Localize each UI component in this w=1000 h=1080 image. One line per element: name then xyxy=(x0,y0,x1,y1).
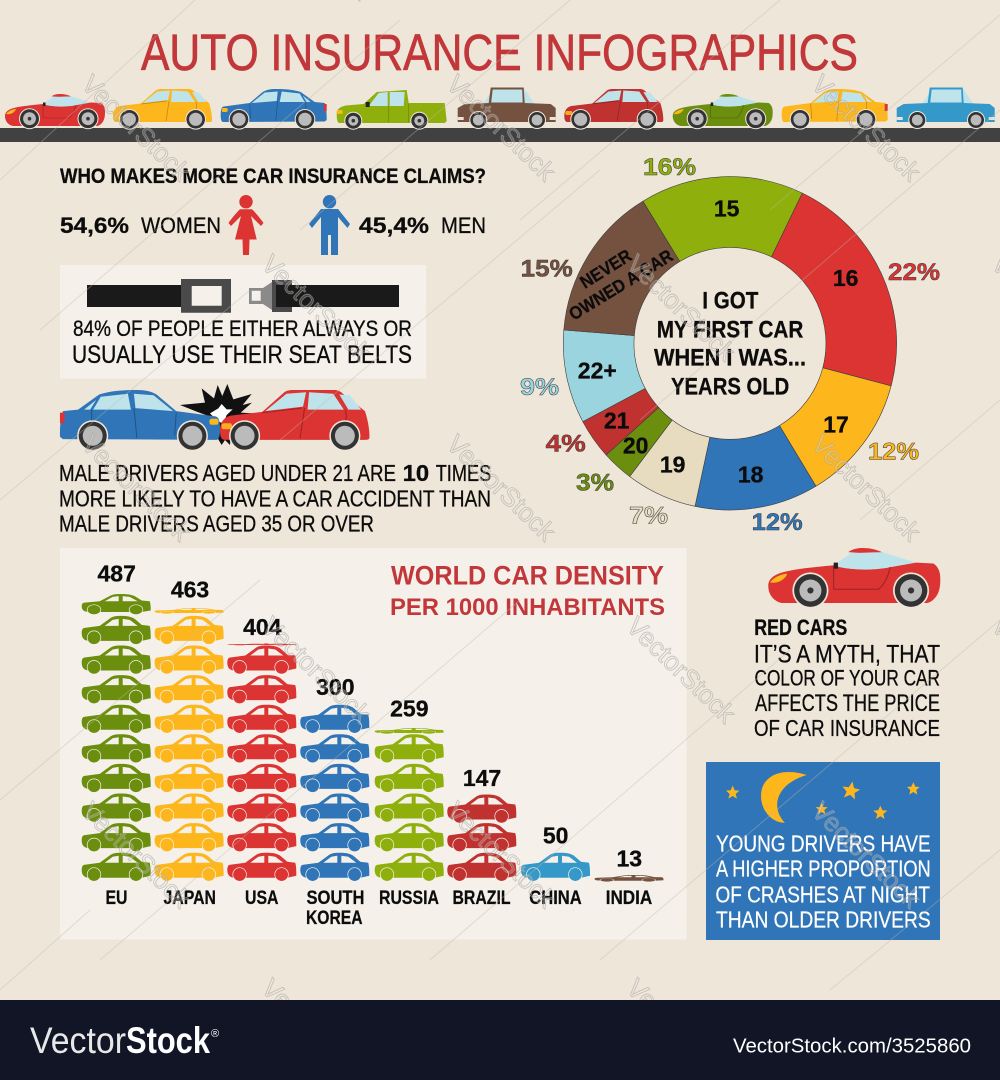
bar: South Korea 300 xyxy=(300,674,369,929)
crash text: 10 xyxy=(403,460,429,486)
bar: China 50: CHINA xyxy=(529,888,582,909)
bar: Japan 463: JAPAN xyxy=(164,888,216,909)
watermark overlay: VectorStock xyxy=(621,611,742,729)
footer logo xyxy=(30,1020,219,1061)
car: red wagon in crash xyxy=(220,390,369,451)
chart heading: WORLD CAR DENSITY xyxy=(391,560,664,590)
car: blue sedan xyxy=(221,89,327,130)
crash text: TIMES xyxy=(436,460,491,486)
car: brown old car xyxy=(458,88,556,129)
car: olive sports xyxy=(673,94,773,129)
chart heading: PER 1000 INHABITANTS xyxy=(390,594,665,621)
donut centre text: I GOT xyxy=(702,287,759,314)
icon: seat belt xyxy=(87,279,399,313)
bar: Japan 463: 463 xyxy=(171,576,209,602)
donut centre text xyxy=(654,287,806,400)
car: blue sedan in crash xyxy=(60,390,220,451)
car: light blue old car xyxy=(897,88,995,129)
bar: Brazil 147 xyxy=(447,765,516,909)
bar: Brazil 147: BRAZIL xyxy=(452,888,511,909)
donut slice labels: OWNED A CAR xyxy=(565,246,676,324)
crash text: MORE LIKELY TO HAVE A CAR ACCIDENT THAN xyxy=(59,486,491,512)
crash text xyxy=(59,460,491,537)
slice never owned xyxy=(564,201,680,336)
slice 17 xyxy=(780,368,891,486)
donut centre text: WHEN I WAS... xyxy=(654,345,806,372)
donut percent labels: 7% xyxy=(629,502,668,529)
bar: China 50: 50 xyxy=(543,822,568,848)
title: AUTO INSURANCE INFOGRAPHICS xyxy=(141,24,858,81)
illustration: car crash xyxy=(60,384,369,451)
watermark overlay: VectorStock xyxy=(256,249,377,367)
donut slice labels: 22+ xyxy=(578,357,617,383)
bar: China 50 xyxy=(521,822,590,909)
watermark overlay: VectorStock xyxy=(806,796,927,914)
slice 19 xyxy=(630,420,710,506)
footer url: VectorStock.com/3525860 xyxy=(733,1036,971,1058)
watermark overlay: VectorStock xyxy=(806,429,927,547)
bar: India 13 xyxy=(594,846,664,909)
icon: moon and stars xyxy=(726,772,920,823)
bar: USA 404: USA xyxy=(245,888,279,909)
icon: woman xyxy=(228,195,264,255)
bar: Brazil 147: 147 xyxy=(463,765,501,791)
donut centre text: MY FIRST CAR xyxy=(657,316,803,343)
car: red sports xyxy=(5,94,105,129)
footer logo: ® xyxy=(211,1028,219,1040)
panel: night crashes xyxy=(706,762,940,940)
panel: seat belts xyxy=(60,265,426,378)
seat belt text: USUALLY USE THEIR SEAT BELTS xyxy=(72,341,412,369)
donut slice labels xyxy=(565,196,858,488)
bar: EU 487 xyxy=(82,561,151,909)
chart heading xyxy=(390,560,665,621)
bar: Russia 259 xyxy=(375,696,444,909)
women statistic: WOMEN xyxy=(141,213,221,238)
watermark overlay: VectorStock xyxy=(441,429,562,547)
slice 15 xyxy=(643,177,802,262)
slice 22+ xyxy=(563,330,645,422)
bar: Russia 259: 259 xyxy=(390,696,428,722)
night crashes text: OF CRASHES AT NIGHT xyxy=(716,881,930,907)
road with row of cars xyxy=(0,88,1000,142)
bar: Japan 463 xyxy=(155,576,224,909)
red cars text: IT’S A MYTH, THAT xyxy=(754,641,940,669)
bar: USA 404: 404 xyxy=(243,614,282,640)
watermark overlay: VectorStock xyxy=(76,796,197,914)
car: large red sports car xyxy=(768,548,940,609)
men statistic: MEN xyxy=(441,213,486,238)
donut slice labels: 20 xyxy=(623,432,648,458)
seat belt text xyxy=(72,316,412,369)
donut centre text: YEARS OLD xyxy=(671,373,789,400)
bar: South Korea 300: 300 xyxy=(316,674,354,700)
donut slice labels: 18 xyxy=(738,462,764,488)
slice 21 xyxy=(583,388,659,455)
seat belt text: 84% OF PEOPLE EITHER ALWAYS OR xyxy=(73,316,412,341)
red cars text: RED CARS xyxy=(754,615,847,640)
car: red wagon xyxy=(564,89,663,130)
women statistic xyxy=(60,213,221,238)
donut slice labels: 15 xyxy=(714,196,740,222)
bar: USA 404 xyxy=(227,614,296,909)
bar: EU 487: 487 xyxy=(98,561,136,587)
donut chart: first car age xyxy=(563,177,897,510)
slice 20 xyxy=(606,408,672,476)
donut percent labels: 15% xyxy=(521,256,573,283)
men statistic xyxy=(359,213,486,238)
donut slice labels: 19 xyxy=(660,452,685,478)
red cars text: AFFECTS THE PRICE xyxy=(755,690,940,717)
red cars text xyxy=(754,615,940,741)
night crashes text: A HIGHER PROPORTION xyxy=(716,856,931,882)
donut percent labels: 22% xyxy=(888,259,940,286)
crash text: MALE DRIVERS AGED 35 OR OVER xyxy=(59,511,374,537)
night crashes text: YOUNG DRIVERS HAVE xyxy=(716,831,931,857)
watermark overlay: VectorStock xyxy=(256,611,377,729)
donut percent labels: 9% xyxy=(520,374,559,401)
night crashes text xyxy=(716,831,931,933)
watermark overlay: VectorStock xyxy=(806,69,927,187)
women statistic: 54,6% xyxy=(60,213,129,238)
claims heading: WHO MAKES MORE CAR INSURANCE CLAIMS? xyxy=(60,165,486,188)
watermark overlay: VectorStock xyxy=(621,249,742,367)
footer bar xyxy=(0,1000,1000,1080)
donut slice labels: 16 xyxy=(833,265,858,291)
donut percent labels: 12% xyxy=(752,509,803,536)
crash text: MALE DRIVERS AGED UNDER 21 ARE xyxy=(59,460,396,486)
night crashes text: THAN OLDER DRIVERS xyxy=(716,907,931,933)
footer logo: Vector xyxy=(30,1020,126,1061)
icon: explosion xyxy=(180,384,254,445)
car: yellow wagon xyxy=(113,89,212,130)
watermark overlay: VectorStock xyxy=(441,69,562,187)
donut percent labels: 3% xyxy=(576,470,614,497)
bar: India 13: INDIA xyxy=(606,888,653,909)
icon: man xyxy=(309,195,350,255)
bar: India 13: 13 xyxy=(617,846,642,872)
donut percent labels: 12% xyxy=(868,438,919,465)
donut percent labels xyxy=(520,154,940,536)
car: green pickup xyxy=(337,90,447,130)
donut percent labels: 4% xyxy=(546,431,586,458)
donut slice labels: 21 xyxy=(604,407,630,433)
bar: South Korea 300: SOUTH xyxy=(306,888,364,909)
red cars text: OF CAR INSURANCE xyxy=(754,715,940,741)
footer logo: Stock xyxy=(126,1020,210,1061)
watermark overlay: VectorStock xyxy=(76,429,197,547)
donut slice labels: 17 xyxy=(823,412,849,438)
red cars text: COLOR OF YOUR CAR xyxy=(754,666,940,691)
panel: world car density xyxy=(60,548,686,940)
donut slice labels: NEVER xyxy=(576,245,635,292)
watermark overlay: VectorStock xyxy=(441,796,562,914)
slice 16 xyxy=(772,193,897,386)
bar: South Korea 300: KOREA xyxy=(306,908,363,929)
bar: EU 487: EU xyxy=(106,888,128,909)
slice 18 xyxy=(695,426,816,510)
bar: Russia 259: RUSSIA xyxy=(379,888,439,909)
donut percent labels: 16% xyxy=(643,154,696,181)
car: yellow sedan xyxy=(782,89,888,130)
men statistic: 45,4% xyxy=(359,213,429,238)
watermark overlay: VectorStock xyxy=(76,69,197,187)
